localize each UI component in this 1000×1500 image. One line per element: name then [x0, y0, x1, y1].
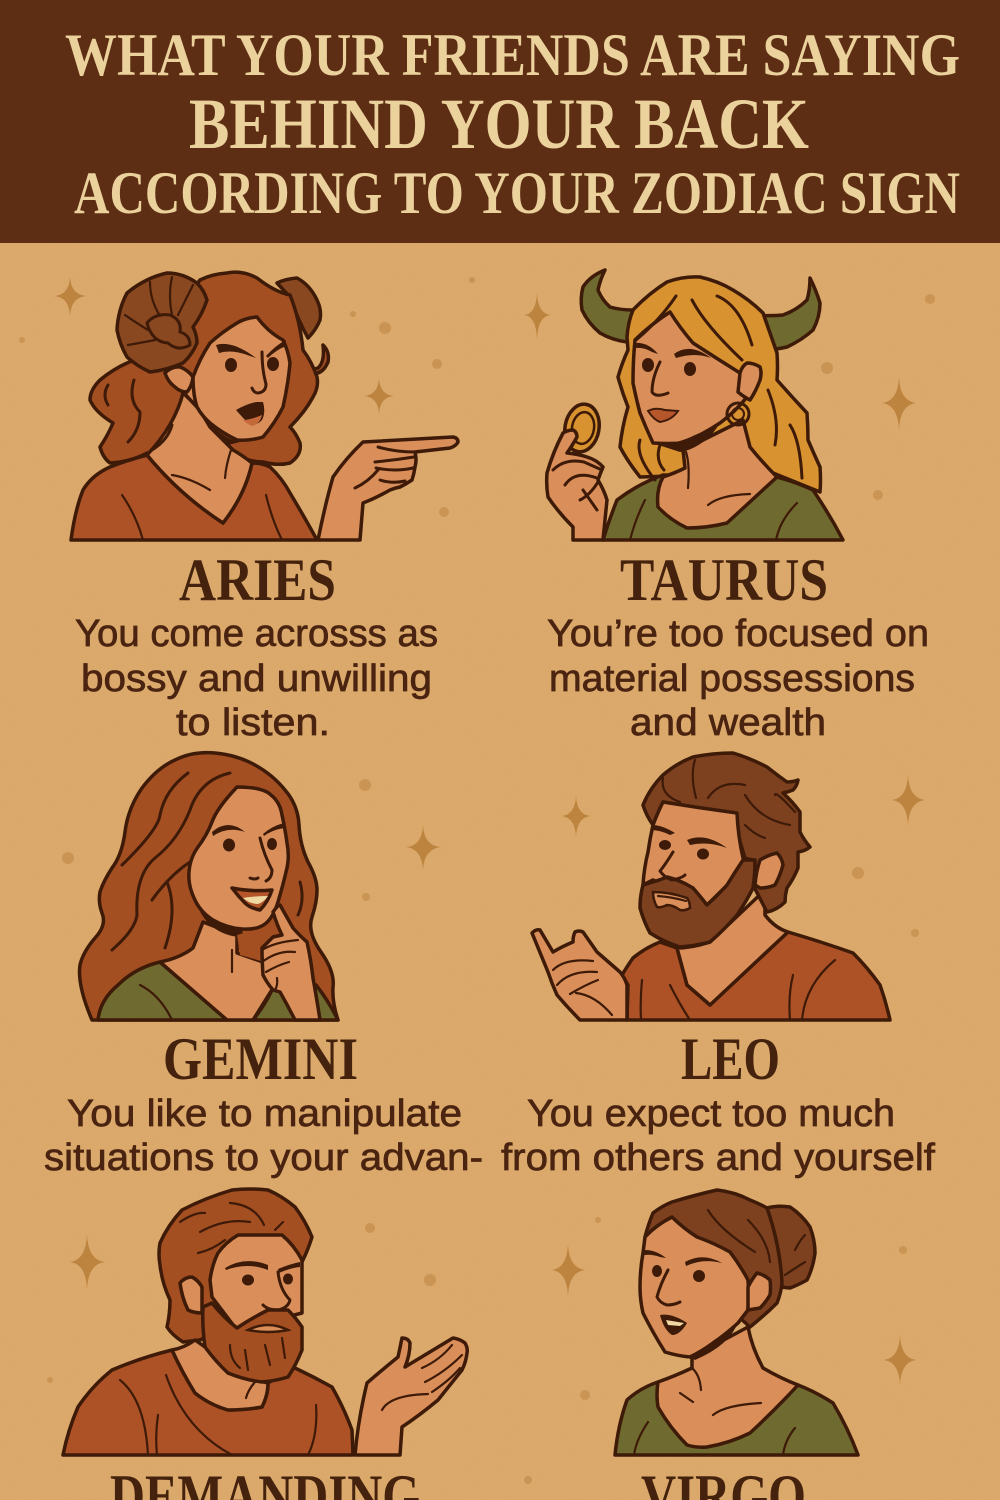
label: Gemini: GEMINI [163, 1026, 358, 1092]
illustration: Virgo woman with hair bun [615, 1190, 858, 1455]
description: Aries: bossy and unwilling [81, 658, 432, 700]
description: Leo [501, 1093, 935, 1179]
description: Leo: You expect too much [527, 1093, 895, 1135]
description: Leo: from others and yourself [501, 1137, 935, 1179]
description: Taurus: You’re too focused on [547, 613, 929, 655]
title banner [0, 0, 1000, 243]
title line 2: BEHIND YOUR BACK [189, 84, 809, 164]
description: Gemini [44, 1093, 483, 1179]
illustration: bearded man with open hand [63, 1189, 467, 1455]
description: Taurus [547, 613, 929, 744]
description: Aries [75, 613, 438, 744]
description: Taurus: and wealth [630, 702, 826, 744]
label: Leo: LEO [681, 1026, 780, 1092]
illustration: Gemini woman with long hair, hand on chin [80, 753, 338, 1020]
illustration: Aries woman with ram horns pointing [71, 272, 458, 540]
illustration: Leo bearded man gesturing [532, 753, 890, 1020]
description: Gemini: situations to your advan- [44, 1137, 483, 1179]
description: Gemini: You like to manipulate [67, 1093, 462, 1135]
label: Taurus: TAURUS [620, 547, 828, 613]
label: Aries: ARIES [179, 547, 336, 613]
illustration: Taurus woman with bull horns holding coin [547, 270, 843, 540]
description: Aries: You come acrosss as [75, 613, 438, 655]
description: Aries: to listen. [176, 702, 330, 744]
description: Taurus: material possessions [549, 658, 915, 700]
